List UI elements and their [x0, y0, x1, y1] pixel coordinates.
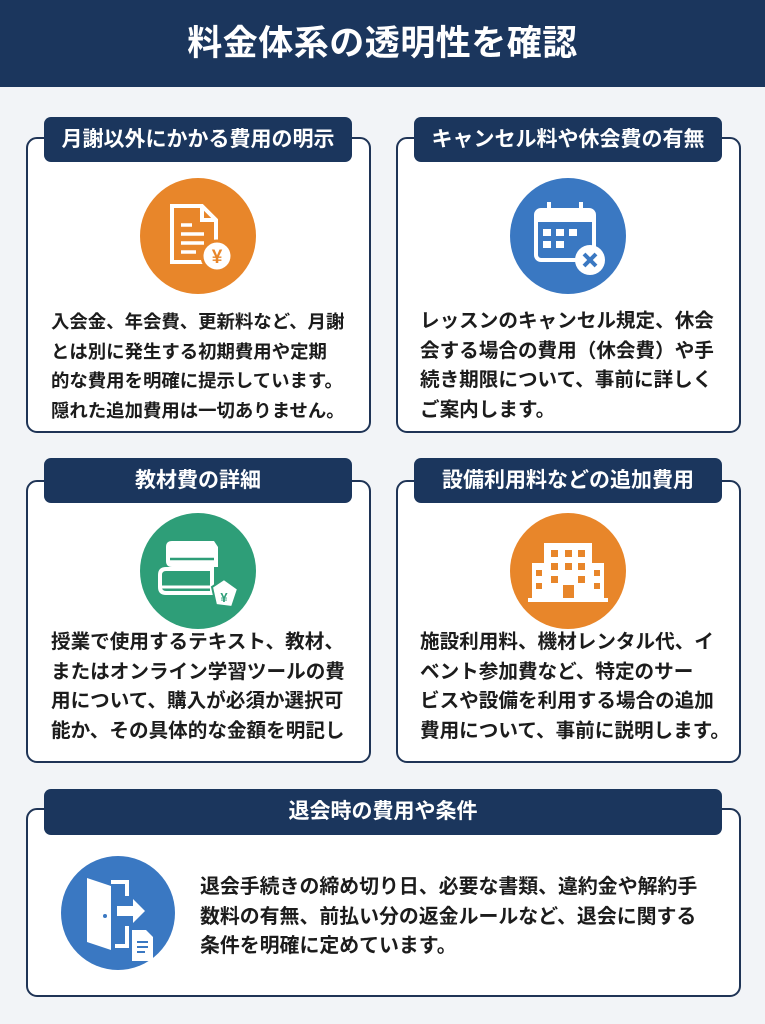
icon: books tag: ¥	[220, 590, 228, 605]
text: materials: 能か、その具体的な金額を明記し	[51, 720, 345, 742]
text: materials: またはオンライン学習ツールの費	[51, 660, 345, 682]
heading: monthly fee extras	[44, 117, 352, 162]
heading: materials	[44, 458, 352, 503]
icon: document yen: ¥	[212, 247, 223, 268]
text: withdrawal: 条件を明確に定めています。	[200, 935, 457, 957]
panel: materials	[26, 480, 371, 763]
text: cancellation: 会する場合の費用（休会費）や手	[420, 340, 714, 362]
icon: exit door	[61, 856, 175, 970]
heading: cancellation	[414, 117, 722, 162]
icon: books tag	[140, 513, 256, 629]
text: facility: 施設利用料、機材レンタル代、イ	[420, 631, 714, 653]
icon: calendar cancel	[510, 178, 626, 294]
text: cancellation: レッスンのキャンセル規定、休会	[420, 310, 714, 332]
text: cancellation: ご案内します。	[420, 398, 555, 420]
text: monthly fee extras: 入会金、年会費、更新料など、月謝	[51, 311, 344, 332]
heading: withdrawal: 退会時の費用や条件	[288, 800, 478, 823]
heading: materials: 教材費の詳細	[135, 469, 261, 492]
text: materials: 用について、購入が必須か選択可	[51, 690, 343, 712]
text: withdrawal: 退会手続きの締め切り日、必要な書類、違約金や解約手	[200, 876, 697, 898]
panel: withdrawal	[26, 808, 741, 997]
title	[0, 0, 765, 87]
text: withdrawal	[200, 876, 697, 957]
heading: facility	[414, 458, 722, 503]
heading: cancellation: キャンセル料や休会費の有無	[432, 128, 704, 151]
icon: building	[510, 513, 626, 629]
text: withdrawal: 数料の有無、前払い分の返金ルールなど、退会に関する	[200, 906, 696, 928]
icon: document yen	[140, 178, 256, 294]
text: monthly fee extras: 隠れた追加費用は一切ありません。	[51, 400, 345, 420]
text: facility: ビスや設備を利用する場合の追加	[420, 690, 714, 712]
heading: facility: 設備利用料などの追加費用	[442, 469, 694, 492]
text: cancellation	[420, 310, 714, 420]
heading: withdrawal	[44, 789, 722, 835]
panel: cancellation	[396, 137, 741, 433]
heading: monthly fee extras: 月謝以外にかかる費用の明示	[62, 128, 334, 151]
title: 料金体系の透明性を確認	[187, 24, 578, 63]
text: materials	[51, 631, 345, 742]
panel: facility	[396, 480, 741, 763]
text: monthly fee extras	[51, 311, 345, 420]
text: facility	[420, 631, 730, 742]
text: facility: 費用について、事前に説明します。	[420, 720, 730, 742]
text: monthly fee extras: とは別に発生する初期費用や定期	[51, 340, 327, 362]
text: cancellation: 続き期限について、事前に詳しく	[420, 369, 712, 391]
text: monthly fee extras: 的な費用を明確に提示しています。	[51, 370, 343, 391]
panel: monthly fee extras	[26, 137, 371, 433]
text: facility: ベント参加費など、特定のサー	[420, 660, 693, 682]
text: materials: 授業で使用するテキスト、教材、	[51, 631, 344, 653]
